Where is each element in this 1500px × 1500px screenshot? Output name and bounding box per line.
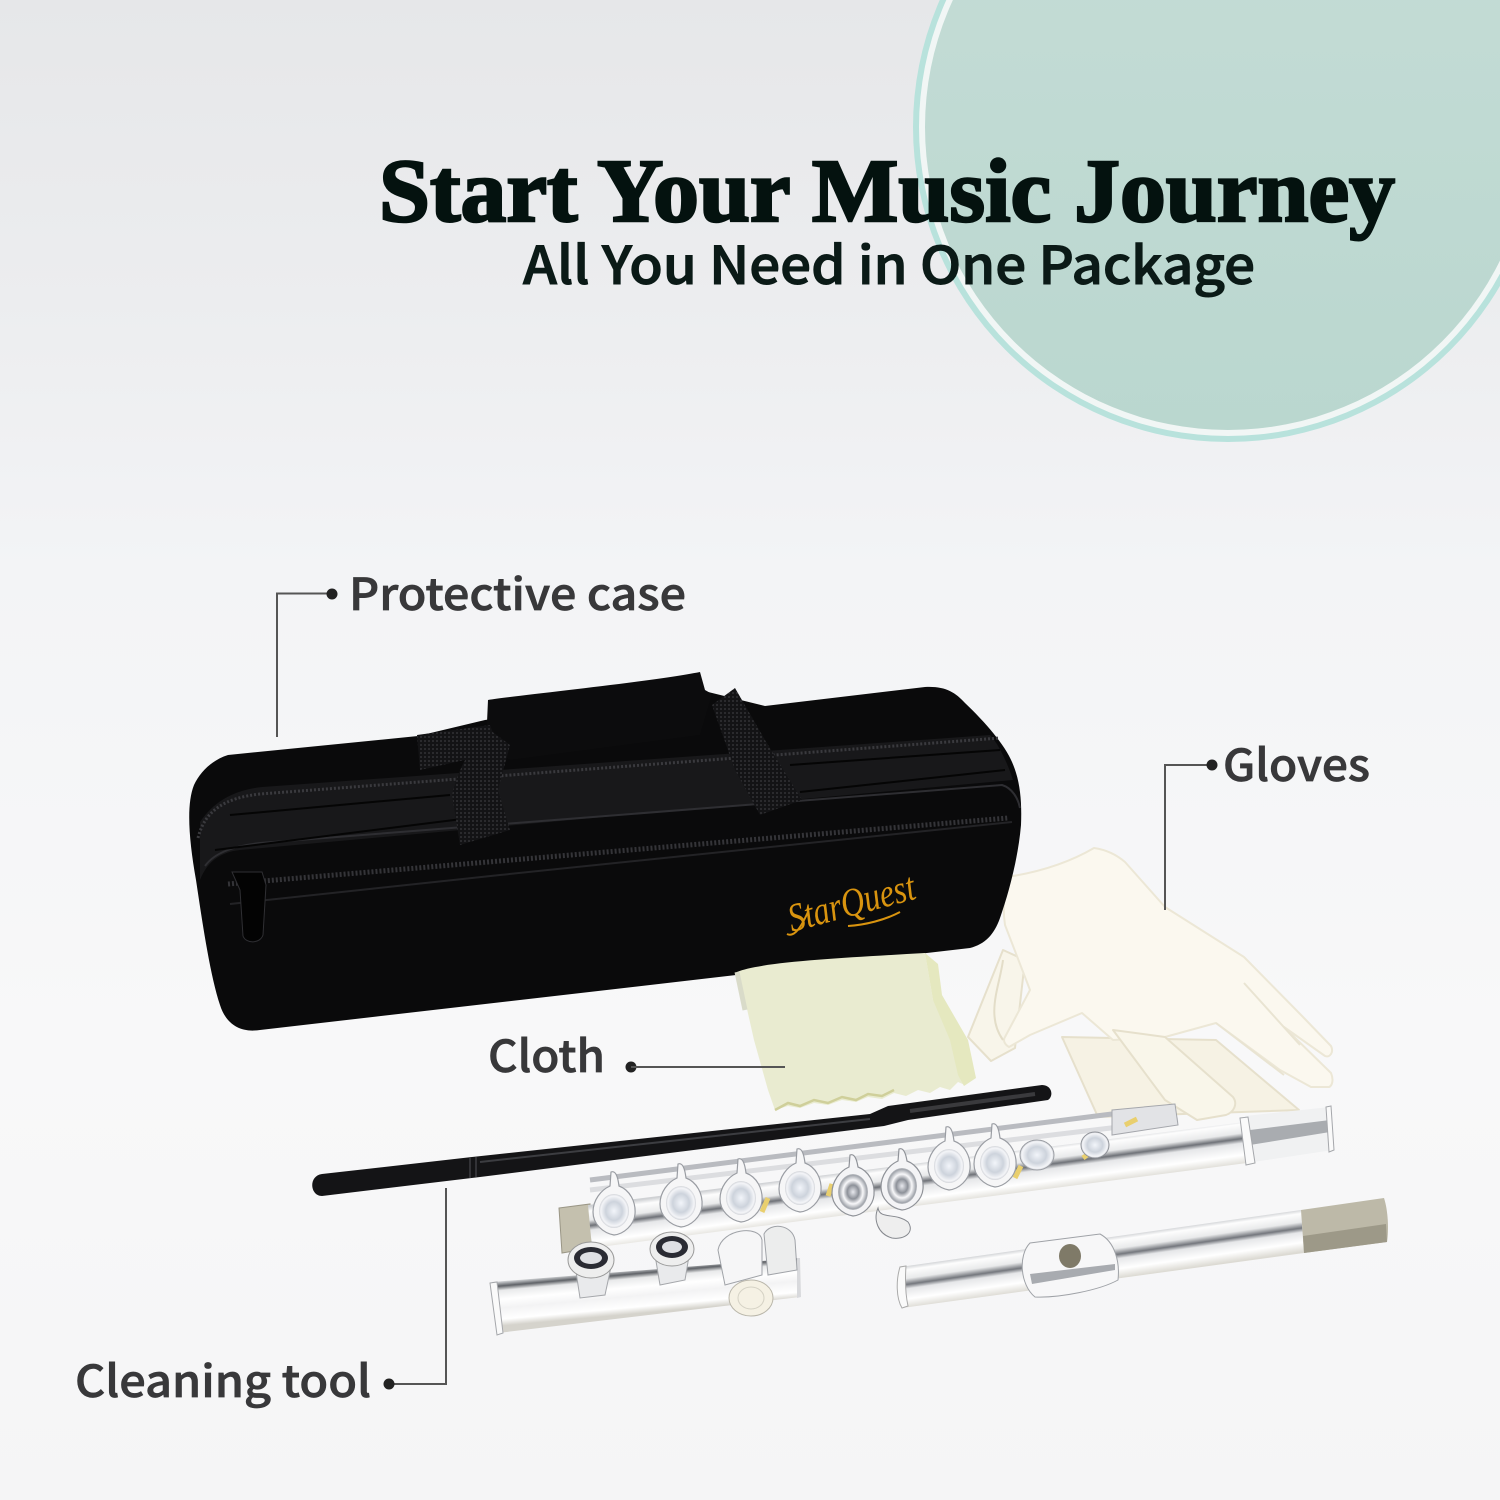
handles [486,672,712,760]
brand logo: StarQuest [783,863,921,941]
pocket zipper [228,818,1008,884]
trill lever [876,1208,910,1238]
callout: gloves [1165,730,1370,910]
callout: cloth [488,1021,785,1085]
key rods [590,1106,1175,1180]
polishing cloth [737,953,976,1110]
protective case [189,672,1021,1031]
pad colour accents [762,1119,1137,1212]
keys [593,1172,635,1235]
tube [588,1122,1247,1248]
case top panel [200,735,1013,880]
subtitle: All You Need in One Package [523,224,1255,299]
embouchure hole [1059,1244,1081,1268]
case body [189,687,1021,1031]
decorative teal circle [913,0,1500,442]
callout: protective case [277,559,686,737]
zipper pull [232,872,266,942]
callout: cleaning tool [75,1188,446,1410]
gloves [968,848,1332,1120]
callout: protective case: Protective case [349,559,686,623]
callout: cleaning tool: Cleaning tool [75,1346,371,1410]
lip plate [1022,1234,1118,1297]
title: Start Your Music Journey [379,142,1395,241]
flute: foot joint [490,1226,801,1335]
callout: cloth: Cloth [488,1021,605,1085]
nickel tenon [559,1204,592,1253]
callout: gloves: Gloves [1223,730,1370,794]
flute: head joint [897,1198,1388,1308]
cleaning rod [312,1085,1051,1196]
flute: main body with keys [559,1104,1334,1253]
